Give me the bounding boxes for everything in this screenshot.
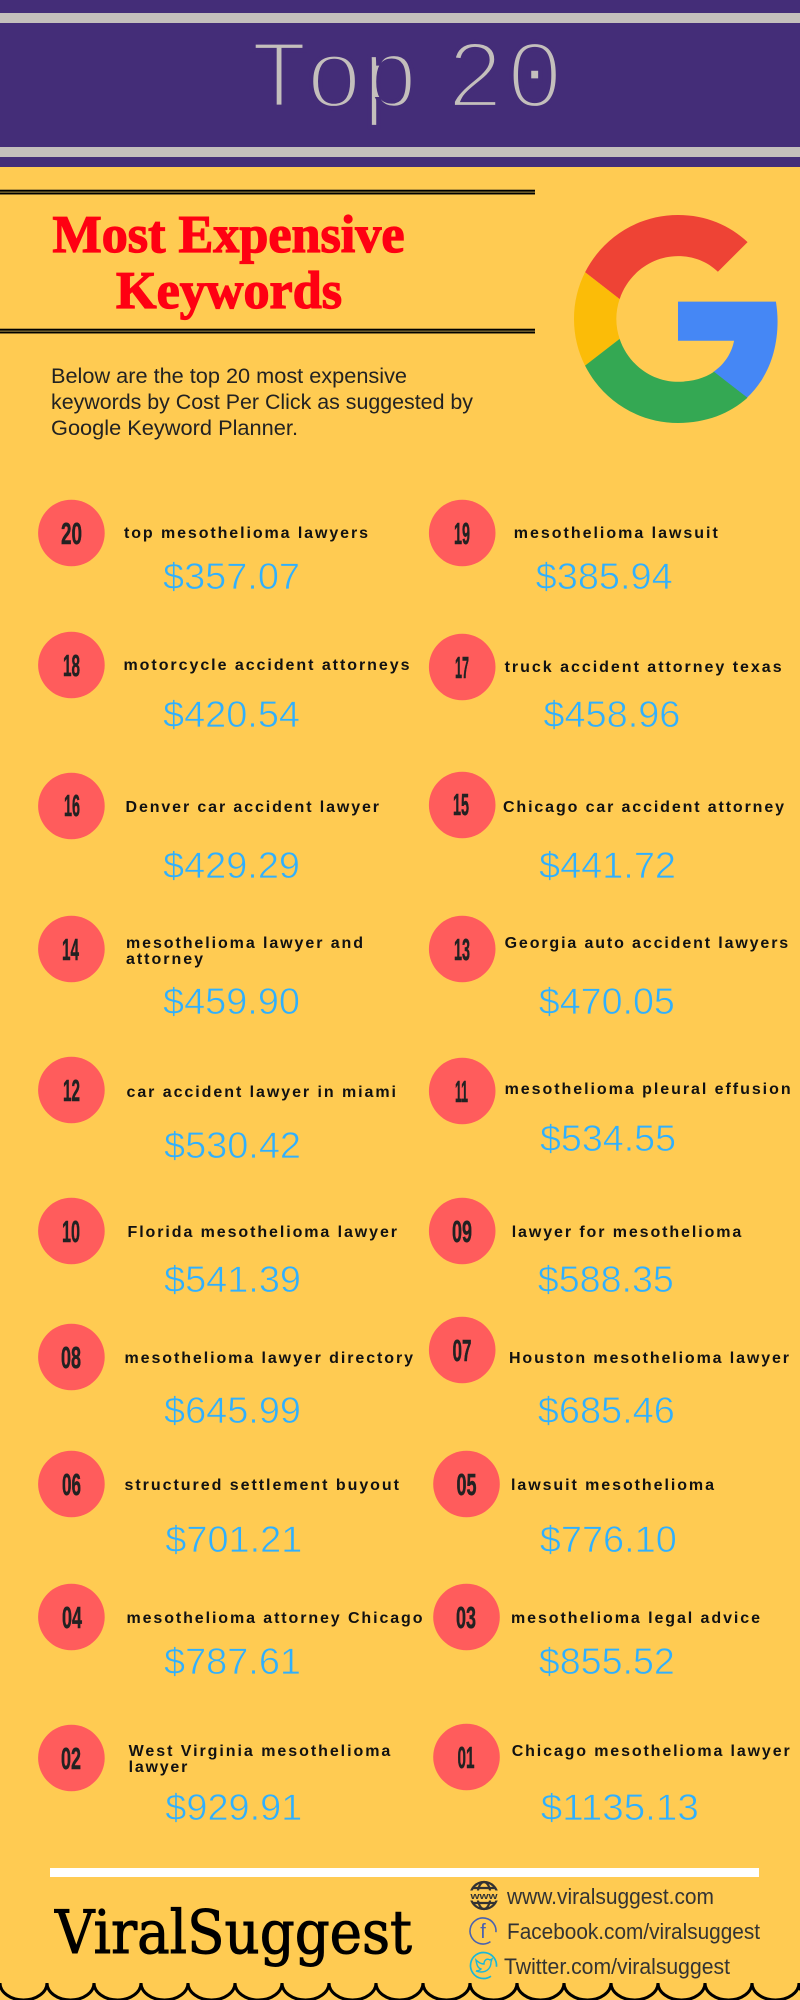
- item 17: [429, 634, 782, 735]
- item 03: $855.52: [539, 1640, 675, 1682]
- item 20: [38, 500, 368, 597]
- item 16: Denver car accident lawyer: [126, 799, 379, 816]
- item 09: $588.35: [538, 1258, 674, 1300]
- item 15: [429, 772, 784, 886]
- item 04: 04: [62, 1600, 82, 1635]
- item 19: [429, 500, 718, 597]
- item 11: 11: [455, 1074, 468, 1109]
- item 13: 13: [454, 932, 470, 967]
- item 06: [38, 1451, 400, 1560]
- icon: facebook: [465, 1913, 501, 1949]
- item 18: motorcycle accident attorneys: [124, 657, 410, 674]
- item 19: mesothelioma lawsuit: [514, 525, 718, 542]
- item 13: Georgia auto accident lawyers: [505, 935, 788, 952]
- item 16: 16: [64, 788, 80, 823]
- item 08: [38, 1324, 413, 1431]
- item 13: [429, 916, 788, 1022]
- item 07: 07: [452, 1333, 472, 1368]
- item 14: mesothelioma lawyer and: [126, 935, 363, 952]
- item 17: truck accident attorney texas: [505, 659, 782, 676]
- item 05: $776.10: [540, 1518, 677, 1560]
- item 13: $470.05: [539, 980, 675, 1022]
- item 08: 08: [61, 1340, 81, 1375]
- item 01: $1135.13: [541, 1786, 699, 1828]
- item 04: [38, 1584, 423, 1682]
- item 07: [429, 1317, 789, 1431]
- intro text: Google Keyword Planner.: [51, 417, 298, 440]
- item 18: [38, 632, 410, 735]
- item 18: $420.54: [163, 693, 300, 735]
- item 05: [433, 1451, 714, 1560]
- item 12: 12: [63, 1073, 80, 1108]
- website link: www.viralsuggest.com: [506, 1884, 714, 1909]
- item 04: $787.61: [164, 1640, 301, 1682]
- item 01: 01: [458, 1740, 474, 1775]
- intro text: [51, 365, 474, 440]
- item 01: Chicago mesothelioma lawyer: [512, 1743, 790, 1760]
- item 15: 15: [453, 787, 469, 822]
- item 03: 03: [456, 1600, 476, 1635]
- item 08: $645.99: [164, 1389, 301, 1431]
- item 05: lawsuit mesothelioma: [511, 1477, 714, 1494]
- item 12: car accident lawyer in miami: [126, 1084, 396, 1101]
- intro text: Below are the top 20 most expensive: [51, 365, 407, 388]
- heading: Most Expensive: [52, 206, 404, 264]
- scalloped bottom border: [0, 1983, 800, 2000]
- item 02: 02: [61, 1741, 81, 1776]
- item 11: $534.55: [540, 1117, 676, 1159]
- item 10: [38, 1198, 397, 1300]
- item 10: Florida mesothelioma lawyer: [128, 1224, 397, 1241]
- icon: website globe: www: [469, 1891, 499, 1901]
- item 17: 17: [455, 650, 469, 685]
- item 18: 18: [63, 648, 80, 683]
- item 12: $530.42: [164, 1124, 301, 1166]
- item 14: [38, 916, 363, 1022]
- item 19: 19: [454, 516, 470, 551]
- icon: twitter: [465, 1947, 502, 1984]
- header banner: [0, 0, 800, 167]
- icon: website globe: [468, 1882, 500, 1909]
- item 17: $458.96: [543, 693, 680, 735]
- item 09: 09: [452, 1214, 472, 1249]
- icon: google G logo: [574, 215, 778, 423]
- item 06: 06: [62, 1467, 81, 1502]
- title: Top 20: [250, 27, 564, 137]
- footer divider: [50, 1868, 759, 1877]
- item 06: $701.21: [165, 1518, 302, 1560]
- item 15: $441.72: [539, 844, 676, 886]
- item 15: Chicago car accident attorney: [503, 799, 784, 816]
- item 14: 14: [62, 932, 79, 967]
- item 02: [38, 1725, 390, 1828]
- item 14: attorney: [126, 951, 203, 968]
- item 02: $929.91: [165, 1786, 302, 1828]
- item 11: [429, 1058, 791, 1159]
- item 05: 05: [456, 1467, 476, 1502]
- item 20: 20: [61, 516, 82, 551]
- item 09: lawyer for mesothelioma: [512, 1224, 741, 1241]
- item 06: structured settlement buyout: [124, 1477, 400, 1494]
- item 02: West Virginia mesothelioma: [129, 1743, 390, 1760]
- item 04: mesothelioma attorney Chicago: [126, 1610, 423, 1627]
- heading: [52, 206, 404, 320]
- icon: facebook: f: [480, 1921, 486, 1943]
- intro text: keywords by Cost Per Click as suggested by: [51, 391, 474, 414]
- item 07: Houston mesothelioma lawyer: [509, 1350, 789, 1367]
- heading block: [0, 190, 535, 334]
- item 11: mesothelioma pleural effusion: [505, 1081, 791, 1098]
- item 14: $459.90: [163, 980, 300, 1022]
- item 20: $357.07: [163, 555, 300, 597]
- brand name: ViralSuggest: [54, 1898, 412, 1968]
- twitter link: Twitter.com/viralsuggest: [504, 1954, 730, 1979]
- item 12: [38, 1057, 396, 1166]
- item 08: mesothelioma lawyer directory: [124, 1350, 413, 1367]
- item 09: [429, 1198, 741, 1300]
- item 10: $541.39: [164, 1258, 301, 1300]
- item 01: [433, 1724, 790, 1828]
- item 16: $429.29: [163, 844, 300, 886]
- item 16: [38, 773, 379, 886]
- facebook link: Facebook.com/viralsuggest: [507, 1919, 760, 1944]
- item 07: $685.46: [538, 1389, 675, 1431]
- heading: Keywords: [116, 262, 342, 320]
- item 10: 10: [62, 1214, 80, 1249]
- item 19: $385.94: [536, 555, 673, 597]
- item 20: top mesothelioma lawyers: [124, 525, 368, 542]
- item 03: [433, 1584, 760, 1682]
- item 03: mesothelioma legal advice: [511, 1610, 760, 1627]
- item 02: lawyer: [129, 1759, 187, 1776]
